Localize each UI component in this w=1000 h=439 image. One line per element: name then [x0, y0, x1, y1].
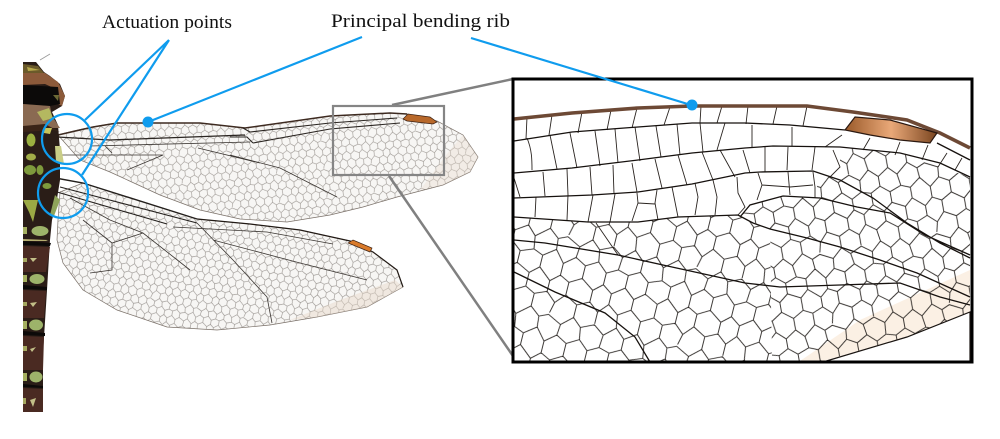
circle: forewing hinge [42, 114, 92, 164]
pterostigma [403, 114, 437, 124]
pterostigma [845, 117, 937, 143]
forewing [57, 113, 478, 222]
head [23, 54, 65, 106]
abdomen segments [23, 226, 51, 412]
trailing edge [823, 312, 970, 362]
costa rib [514, 106, 970, 148]
leader to inset [471, 38, 691, 105]
leader to forewing [148, 37, 362, 122]
inset frame [513, 79, 972, 362]
zoom source rectangle [333, 106, 444, 175]
cell mesh [514, 147, 970, 361]
hindwing [50, 177, 403, 330]
label: principal bending rib: Principal bending rib [331, 11, 510, 32]
label: actuation points: Actuation points [102, 12, 232, 33]
panel: magnified wing inset [513, 79, 972, 362]
thorax markings [23, 104, 64, 222]
zoom connector lines [389, 79, 513, 356]
leader lines [82, 40, 169, 175]
panel: dragonfly photograph [23, 54, 478, 412]
circle: hindwing hinge [38, 168, 88, 218]
pterostigma [348, 240, 372, 252]
callout: principal bending rib [142, 11, 698, 128]
dot on inset [686, 100, 698, 110]
dot on forewing [142, 116, 154, 128]
callout: actuation points [38, 12, 232, 218]
dragonfly body [23, 54, 65, 412]
cross veins [514, 106, 962, 255]
main veins [514, 123, 970, 362]
